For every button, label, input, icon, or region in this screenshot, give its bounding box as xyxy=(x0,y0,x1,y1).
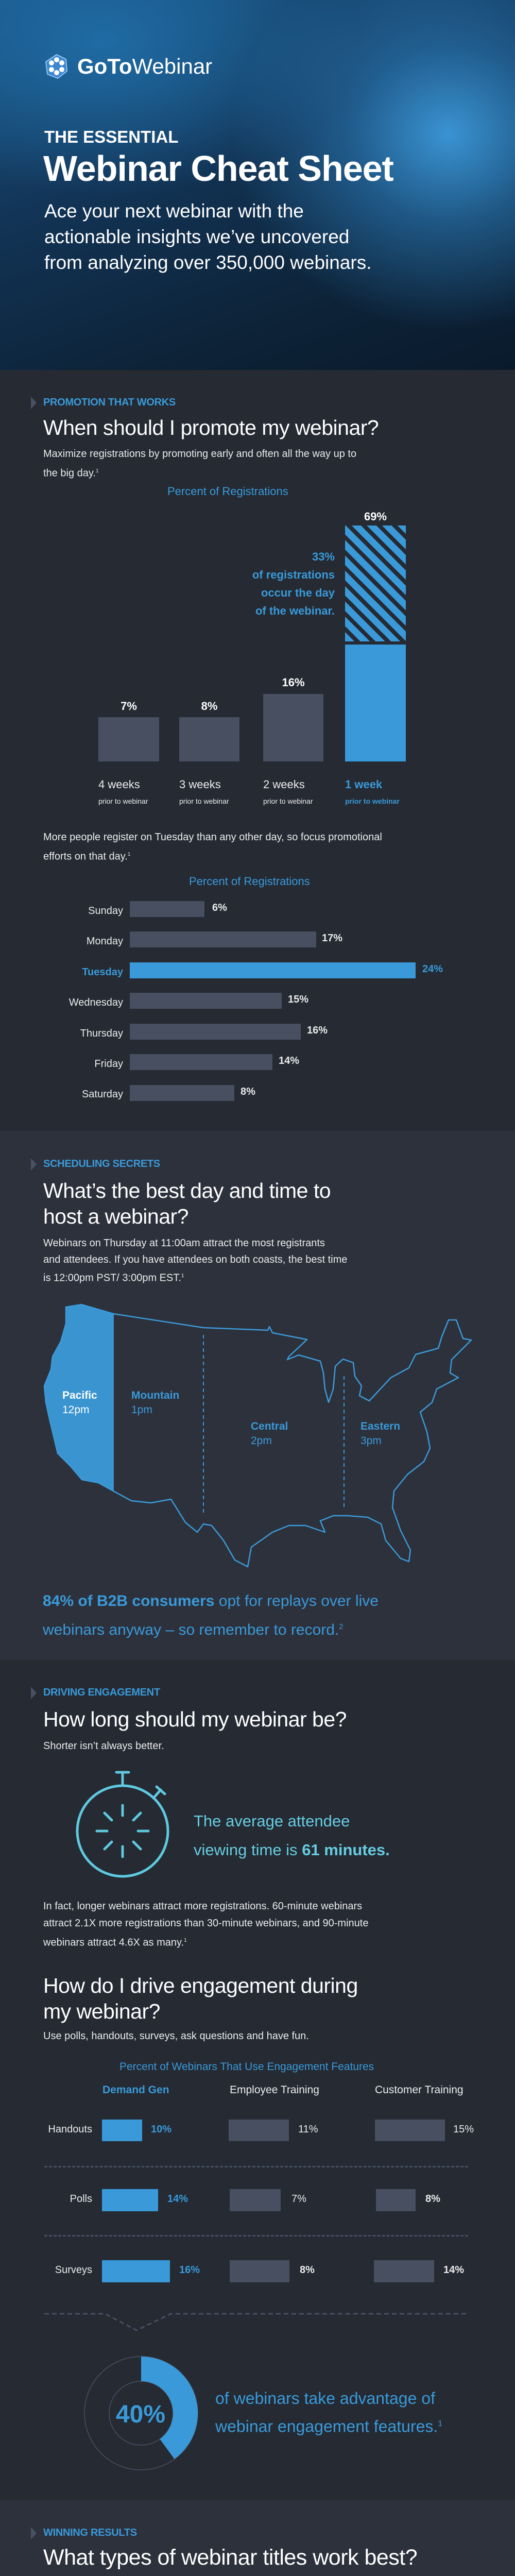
horizontal bar chart: Sunday xyxy=(88,905,123,917)
eyebrow: DRIVING ENGAGEMENT xyxy=(43,1687,160,1698)
engagement chart: 14% xyxy=(443,2264,464,2276)
eyebrow: WINNING RESULTS xyxy=(43,2527,137,2538)
intro text: is 12:00pm PST/ 3:00pm EST.1 xyxy=(43,1273,184,1284)
eyebrow: SCHEDULING SECRETS xyxy=(43,1158,160,1170)
engagement chart: Demand Gen xyxy=(102,2084,169,2096)
panel: scheduling: Mountain xyxy=(131,1389,179,1401)
column chart: prior to webinar xyxy=(263,797,313,805)
eyebrow: PROMOTION THAT WORKS xyxy=(43,397,176,408)
row surveys: Surveys xyxy=(55,2264,92,2276)
heading 2: my webinar? xyxy=(43,1999,160,2023)
callout: of registrations xyxy=(252,568,335,581)
main title: Webinar Cheat Sheet xyxy=(43,148,393,189)
column chart: prior to webinar xyxy=(179,797,229,805)
horizontal bar chart: 8% xyxy=(241,1086,255,1097)
column chart: prior to webinar xyxy=(98,797,148,805)
header banner xyxy=(0,0,515,370)
engagement chart: 16% xyxy=(179,2264,200,2276)
bar 3 weeks xyxy=(179,717,239,761)
subtext: Shorter isn’t always better. xyxy=(43,1740,164,1752)
zone labels xyxy=(62,1389,97,1416)
horizontal bar chart: Tuesday xyxy=(82,967,123,978)
panel: engagement xyxy=(0,1660,515,2500)
intro text xyxy=(43,1238,347,1284)
row handouts: Handouts xyxy=(48,2124,92,2135)
panel: scheduling xyxy=(31,1158,472,1638)
heading: host a webinar? xyxy=(43,1205,188,1228)
paragraph: In fact, longer webinars attract more registrations. 60-minute webinars xyxy=(43,1901,362,1912)
intro text: Maximize registrations by promoting early and often all the way up to xyxy=(43,448,356,460)
donut 40% xyxy=(84,2356,198,2470)
engagement chart: Percent of Webinars That Use Engagement Features xyxy=(119,2061,374,2073)
horizontal bar chart: Saturday xyxy=(82,1089,123,1100)
tuesday text xyxy=(43,832,382,862)
callout: 33% xyxy=(312,550,335,563)
heading xyxy=(43,1179,331,1228)
subtitle: actionable insights we’ve uncovered xyxy=(44,226,349,247)
stat: viewing time: The average attendee xyxy=(194,1812,350,1830)
horizontal bar chart xyxy=(69,875,443,1101)
intro text: and attendees. If you have attendees on both coasts, the best time xyxy=(43,1254,347,1265)
column chart: prior to webinar xyxy=(345,797,400,805)
horizontal bar chart: 15% xyxy=(288,994,308,1005)
horizontal bar chart: Thursday xyxy=(80,1028,123,1039)
column chart: 4 weeks xyxy=(98,778,140,791)
engagement chart: 8% xyxy=(300,2264,315,2276)
column chart: 8% xyxy=(201,700,217,713)
column chart: 16% xyxy=(282,676,305,689)
panel: scheduling: 2pm xyxy=(251,1435,272,1447)
horizontal bar chart: Wednesday xyxy=(69,997,123,1008)
tuesday text: More people register on Tuesday than any other day, so focus promotional xyxy=(43,832,382,843)
zone labels: Pacific xyxy=(62,1389,97,1401)
map xyxy=(43,1303,472,1567)
engagement chart: Customer Training xyxy=(375,2084,464,2096)
column chart: 3 weeks xyxy=(179,778,221,791)
stat text: webinar engagement features.1 xyxy=(215,2417,442,2436)
panel: winning results xyxy=(0,2500,515,2576)
engagement chart: 14% xyxy=(167,2193,188,2205)
intro text: the big day.1 xyxy=(43,468,99,479)
horizontal bar chart: 17% xyxy=(322,933,342,944)
bar 4 weeks xyxy=(98,717,159,761)
heading: What types of webinar titles work best? xyxy=(43,2545,417,2570)
subtext: Use polls, handouts, surveys, ask questions and have fun. xyxy=(43,2030,309,2042)
heading 2 xyxy=(43,1974,358,2023)
panel: scheduling: Central xyxy=(251,1420,288,1432)
heading 2: How do I drive engagement during xyxy=(43,1974,358,1997)
stat: viewing time xyxy=(194,1812,390,1859)
replay stat: 84% of B2B consumers opt for replays over live xyxy=(43,1592,379,1609)
eyebrow title: THE ESSENTIAL xyxy=(44,127,178,146)
subtitle: from analyzing over 350,000 webinars. xyxy=(44,252,372,273)
callout: of the webinar. xyxy=(255,604,335,617)
engagement chart: 15% xyxy=(453,2124,474,2135)
replay stat: webinars anyway – so remember to record.2 xyxy=(43,1621,344,1638)
donut 40%: 40% xyxy=(116,2401,165,2428)
horizontal bar chart: Monday xyxy=(87,936,123,947)
horizontal bar chart: Percent of Registrations xyxy=(189,875,310,888)
engagement chart: 7% xyxy=(291,2193,306,2205)
heading: How long should my webinar be? xyxy=(43,1707,347,1731)
panel: promotion xyxy=(0,370,515,1131)
intro text xyxy=(43,448,356,479)
intro text: Webinars on Thursday at 11:00am attract the most registrants xyxy=(43,1238,325,1249)
zone labels: 12pm xyxy=(62,1404,90,1416)
heading: What’s the best day and time to xyxy=(43,1179,331,1202)
icon: logo flower xyxy=(45,54,67,79)
stat: viewing time: viewing time is 61 minutes. xyxy=(194,1841,390,1859)
panel: scheduling: Eastern xyxy=(360,1420,400,1432)
engagement chart: 10% xyxy=(151,2124,171,2135)
engagement chart: 8% xyxy=(425,2193,440,2205)
subtitle xyxy=(44,200,372,273)
column chart xyxy=(98,485,406,805)
column chart: 69% xyxy=(364,510,387,523)
column chart: Percent of Registrations xyxy=(167,485,288,498)
paragraph: attract 2.1X more registrations than 30-minute webinars, and 90-minute xyxy=(43,1918,368,1929)
engagement chart: Employee Training xyxy=(230,2084,319,2096)
column chart: 2 weeks xyxy=(263,778,305,791)
bar 1 week xyxy=(345,526,406,641)
callout xyxy=(252,550,335,617)
horizontal bar chart: 6% xyxy=(212,902,227,913)
subtitle: Ace your next webinar with the xyxy=(44,200,304,222)
paragraph xyxy=(43,1901,368,1948)
horizontal bar chart: Friday xyxy=(94,1058,123,1070)
panel: scheduling: 1pm xyxy=(131,1404,152,1416)
tuesday text: efforts on that day.1 xyxy=(43,851,130,862)
stat text: of webinars take advantage of xyxy=(215,2389,435,2408)
stat text xyxy=(215,2389,442,2436)
engagement chart xyxy=(44,2061,474,2331)
heading: When should I promote my webinar? xyxy=(43,416,379,439)
icon: stopwatch xyxy=(76,1771,169,1877)
bar 2 weeks xyxy=(263,694,323,761)
column chart: 1 week xyxy=(345,778,382,791)
replay stat xyxy=(43,1592,379,1638)
horizontal bar chart: 16% xyxy=(307,1025,328,1036)
engagement chart: 11% xyxy=(298,2124,318,2135)
horizontal bar chart: 14% xyxy=(279,1055,299,1066)
paragraph: webinars attract 4.6X as many.1 xyxy=(43,1937,187,1948)
logo: GoToWebinar xyxy=(77,54,212,78)
panel: scheduling: 3pm xyxy=(360,1435,382,1447)
column chart: 7% xyxy=(121,700,137,713)
horizontal bar chart: 24% xyxy=(422,963,443,975)
callout: occur the day xyxy=(261,586,335,599)
row polls: Polls xyxy=(70,2193,92,2205)
